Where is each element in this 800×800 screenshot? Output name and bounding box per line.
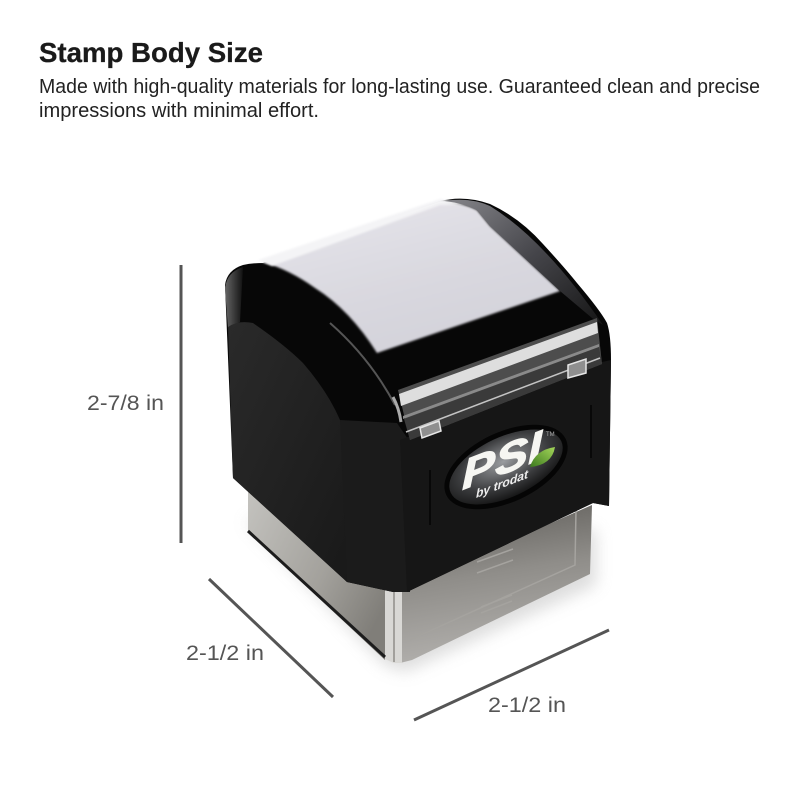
logo leaf (530, 447, 555, 467)
dimension: width (414, 630, 609, 720)
side panel (228, 322, 347, 582)
hinge top highlight (399, 322, 598, 406)
black body silhouette (225, 199, 611, 592)
dome glass edge (445, 200, 603, 325)
logo byline: by trodat (476, 466, 529, 501)
hinge lower band (404, 347, 602, 440)
description text (39, 76, 760, 122)
dimension: depth: 2-1/2 in (186, 642, 264, 665)
logo letters: PSI (462, 420, 544, 499)
logo trademark: TM (546, 432, 555, 438)
description text: Made with high-quality materials for long-lasting use. Guaranteed clean and precise (39, 76, 760, 98)
hinge lower line (406, 358, 600, 432)
hinge mid band (403, 344, 599, 419)
left corner gloss (225, 267, 243, 328)
stamp product illustration (225, 199, 611, 672)
clear base: left side (248, 490, 392, 660)
side arc highlight (330, 323, 395, 405)
dimension: width: 2-1/2 in (488, 694, 566, 717)
base bottom rubber edge (248, 531, 385, 657)
body front slits (430, 405, 591, 525)
title: Stamp Body Size (39, 37, 263, 68)
front corner face (340, 420, 410, 592)
front panel (400, 360, 611, 592)
PSI logo badge (431, 407, 581, 527)
grey label window (263, 202, 560, 353)
base edge highlight (385, 590, 402, 663)
base inner details (410, 510, 576, 640)
description text: impressions with minimal effort. (39, 100, 319, 122)
clear base: front side (395, 505, 592, 663)
hinge strip (398, 318, 602, 440)
dimension: height: 2-7/8 in (87, 392, 164, 415)
soft shadow (245, 520, 596, 672)
top fade into background (258, 199, 470, 266)
hinge clip right (568, 359, 586, 378)
hinge clip left (420, 421, 441, 438)
dimension: depth (186, 579, 333, 697)
